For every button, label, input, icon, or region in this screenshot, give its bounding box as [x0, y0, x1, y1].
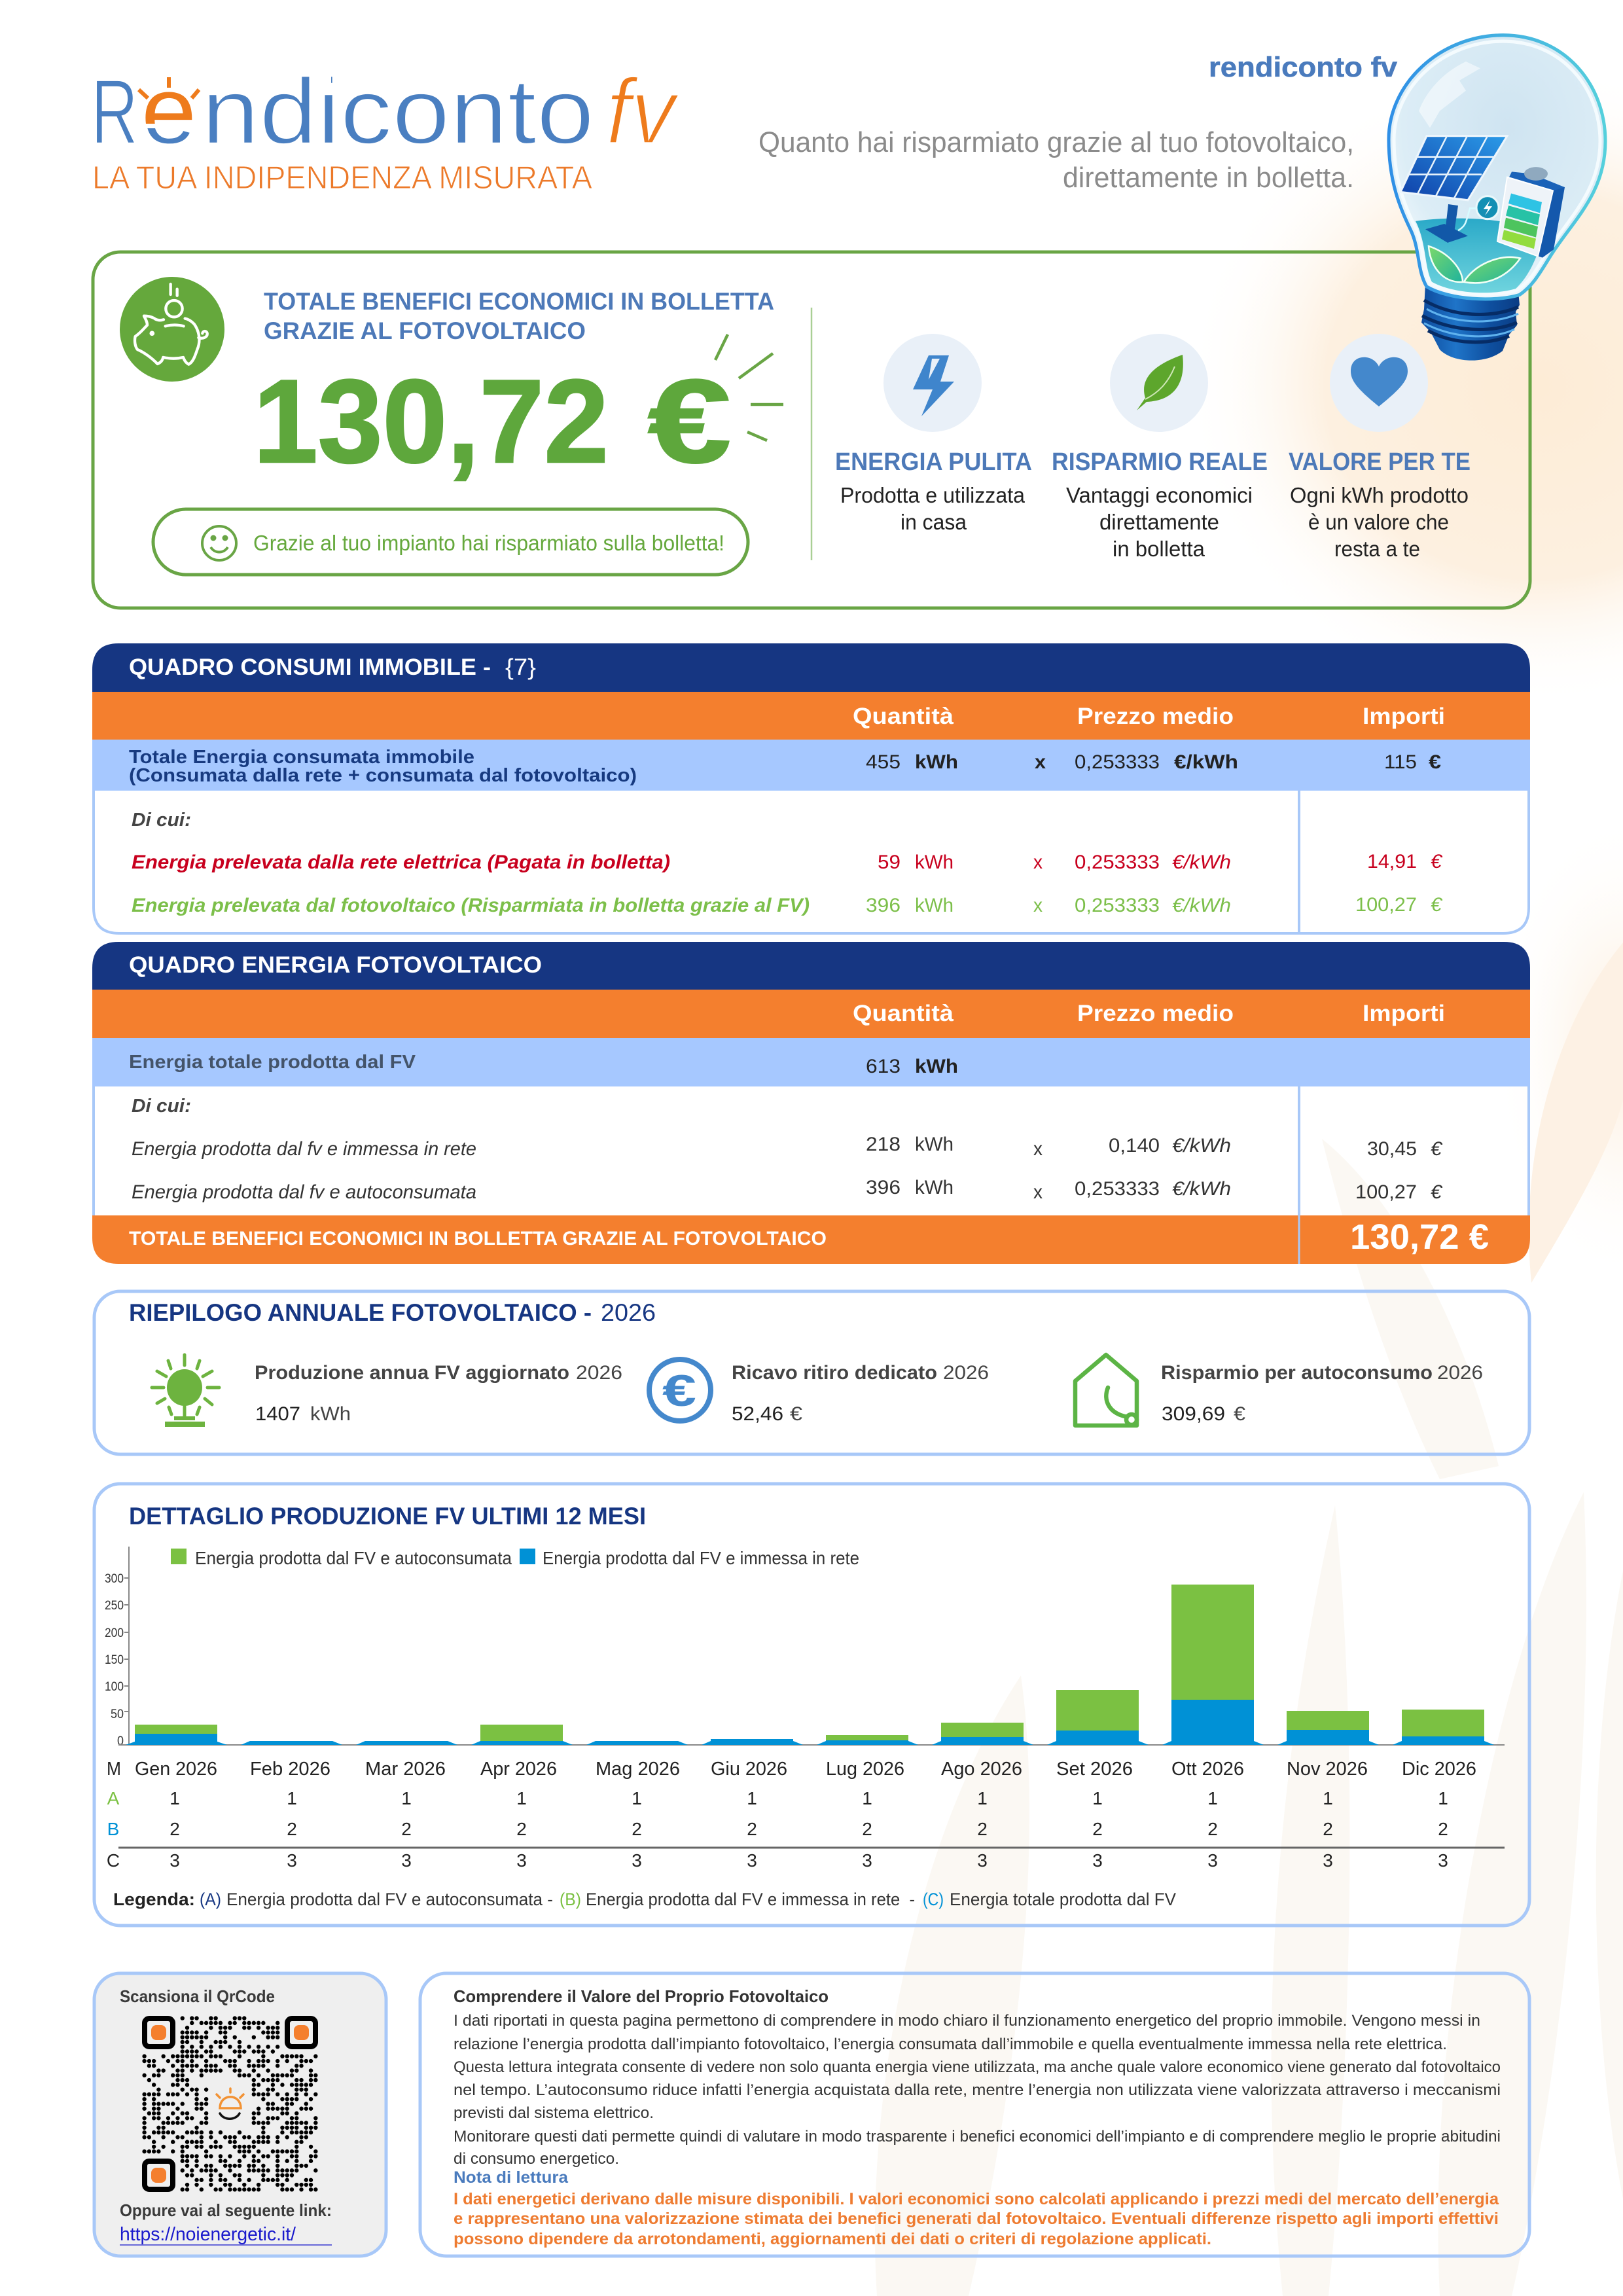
- table title bar: {7}: [505, 655, 536, 680]
- benefit: risparmio reale: direttamente: [1099, 510, 1219, 534]
- bar chart: 0: [117, 1734, 124, 1748]
- row: autoconsumata: €: [1431, 1181, 1442, 1203]
- row: totale energia consumata: (Consumata dalla rete + consumata dal fotovoltaico): [129, 765, 637, 786]
- logo letter e lower half: e: [141, 57, 196, 164]
- row B: 2: [862, 1819, 872, 1839]
- stat: ricavo ritiro dedicato: [732, 1362, 989, 1425]
- row: totale energia consumata: 455: [866, 751, 901, 773]
- explanation text: I dati riportati in questa pagina permettono di comprendere in modo chiaro il funzionamento energetico del proprio immobile. Vengono messi in: [454, 2012, 1480, 2030]
- row: totale energia consumata: Totale Energia consumata immobile: [129, 747, 474, 768]
- bar chart: 200: [105, 1626, 124, 1640]
- row C: 3: [287, 1850, 297, 1871]
- explanation text: [454, 2012, 1501, 2168]
- di cui label: Di cui:: [132, 1096, 191, 1117]
- stat: risparmio autoconsumo: 309,69: [1162, 1403, 1225, 1425]
- row A: 1: [401, 1788, 412, 1808]
- chart legend: Energia prodotta dal FV e immessa in rete: [543, 1548, 859, 1568]
- explanation heading: Comprendere il Valore del Proprio Fotovoltaico: [454, 1986, 829, 2006]
- qr heading: Scansiona il QrCode: [120, 1986, 275, 2006]
- row A: 1: [1323, 1788, 1333, 1808]
- chart key: (A): [200, 1890, 221, 1909]
- row A: 1: [632, 1788, 642, 1808]
- panel: quadro consumi immobile: [92, 643, 1530, 933]
- row B: 2: [1092, 1819, 1103, 1839]
- stat: produzione annua: kWh: [310, 1403, 351, 1425]
- row: immessa in rete: €/kWh: [1172, 1135, 1231, 1157]
- big total amount: 130,72: [253, 355, 609, 488]
- explanation text: Monitorare questi dati permette quindi di valutare in modo trasparente i benefici economici dell’impianto e di comprendere meglio le proprie abitudini: [454, 2128, 1501, 2145]
- chart key: (C): [923, 1890, 944, 1909]
- header subtitle: Quanto hai risparmiato grazie al tuo fotovoltaico,: [758, 126, 1354, 158]
- column headers: Quantità: [853, 704, 954, 729]
- logo letter R: R: [91, 60, 138, 163]
- benefit: risparmio reale: [1052, 448, 1268, 561]
- bar chart: 150: [105, 1653, 124, 1667]
- row B: B: [107, 1819, 119, 1839]
- explanation text: di consumo energetico.: [454, 2150, 619, 2168]
- row: totale energia consumata: kWh: [915, 751, 958, 773]
- row: immessa in rete: kWh: [915, 1134, 954, 1155]
- row C: C: [107, 1850, 120, 1871]
- reading note text: possono dipendere da arrotondamenti, aggiornamenti dei dati o criteri di regolazione applicati.: [454, 2230, 1211, 2248]
- row B: 2: [747, 1819, 757, 1839]
- month row: Set 2026: [1056, 1759, 1133, 1780]
- row: energia dal fotovoltaico: [132, 894, 1442, 916]
- stat: produzione annua: 1407: [255, 1403, 300, 1425]
- row: immessa in rete: €: [1431, 1138, 1442, 1160]
- chart legend: Energia prodotta dal FV e autoconsumata: [195, 1548, 512, 1568]
- benefit: valore per te: Ogni kWh prodotto: [1290, 483, 1469, 507]
- row: autoconsumata: Energia prodotta dal fv e autoconsumata: [132, 1181, 476, 1203]
- stat: risparmio autoconsumo: 2026: [1437, 1362, 1483, 1384]
- explanation text: Questa lettura integrata consente di vedere non solo quanta energia viene utilizzata, ma anche quale valore economico viene generato dal fotovoltaico: [454, 2058, 1501, 2076]
- column headers: Prezzo medio: [1077, 704, 1234, 729]
- stat: produzione annua: Produzione annua FV aggiornato: [255, 1362, 569, 1384]
- chart key: Energia prodotta dal FV e autoconsumata -: [226, 1890, 553, 1909]
- chart key: Legenda:: [113, 1890, 195, 1909]
- logo sun rays: [139, 77, 199, 98]
- benefit: risparmio reale: RISPARMIO REALE: [1052, 448, 1268, 476]
- row C: 3: [1323, 1850, 1333, 1871]
- reading note text: I dati energetici derivano dalle misure disponibili. I valori economici sono calcolati applicando i prezzi medi del mercato dell’energia: [454, 2190, 1499, 2208]
- row: energia dal fotovoltaico: 0,253333: [1075, 895, 1160, 916]
- table title bar: QUADRO ENERGIA FOTOVOLTAICO: [129, 952, 542, 978]
- row: energia dalla rete: 59: [878, 852, 901, 873]
- row: energia dal fotovoltaico: 100,27: [1355, 894, 1417, 916]
- bar chart: 300: [105, 1572, 124, 1586]
- month row: Mar 2026: [365, 1759, 446, 1780]
- row A: 1: [1438, 1788, 1448, 1808]
- row: immessa in rete: 0,140: [1109, 1135, 1160, 1157]
- row C: 3: [169, 1850, 180, 1871]
- logo fv: fv: [606, 60, 680, 164]
- benefit: valore per te: [1289, 448, 1471, 561]
- qr code: [145, 2018, 315, 2189]
- month row: Ago 2026: [941, 1759, 1022, 1780]
- big total amount: €: [648, 355, 731, 488]
- row: energia dal fotovoltaico: €/kWh: [1172, 895, 1231, 916]
- row: energia dal fotovoltaico: kWh: [915, 895, 954, 916]
- row: energia dalla rete: €: [1431, 851, 1442, 872]
- row: energia dal fotovoltaico: €: [1431, 894, 1442, 916]
- table title bar: [92, 643, 1530, 692]
- row: energia dalla rete: [132, 851, 1442, 873]
- row: energia totale prodotta: Energia totale prodotta dal FV: [129, 1052, 416, 1073]
- row: energia totale prodotta: 613: [866, 1056, 901, 1077]
- row: totale energia consumata: €/kWh: [1174, 751, 1238, 773]
- panel: total benefits: [93, 252, 1530, 608]
- icon: smile: [202, 526, 236, 560]
- row A: 1: [516, 1788, 527, 1808]
- explanation text: relazione l’energia prodotta dall’impianto fotovoltaico, l’energia consumata dall’immobile e quella eventualmente immessa nella rete elettrica.: [454, 2036, 1447, 2053]
- icon: sun lamp: [152, 1355, 219, 1427]
- table title bar: [92, 942, 1530, 990]
- row: autoconsumata: 100,27: [1355, 1181, 1417, 1203]
- row B: 2: [516, 1819, 527, 1839]
- month row: Ott 2026: [1171, 1759, 1244, 1780]
- row A: 1: [977, 1788, 988, 1808]
- logo: [95, 77, 678, 188]
- total row: 130,72 €: [1350, 1217, 1489, 1257]
- panel heading: GRAZIE AL FOTOVOLTAICO: [264, 317, 586, 344]
- link label: Oppure vai al seguente link:: [120, 2200, 332, 2220]
- row A: 1: [1092, 1788, 1103, 1808]
- icon: amount sparkle rays: [715, 334, 783, 440]
- header brand name: rendiconto fv: [1209, 52, 1397, 83]
- row: autoconsumata: €/kWh: [1172, 1178, 1231, 1200]
- row B: 2: [1323, 1819, 1333, 1839]
- row B: [107, 1819, 1448, 1839]
- bar chart: 100: [105, 1680, 124, 1694]
- benefit: energia pulita: Prodotta e utilizzata: [840, 483, 1026, 507]
- row A: [107, 1788, 1448, 1808]
- table title bar: QUADRO CONSUMI IMMOBILE -: [129, 655, 491, 680]
- row: autoconsumata: 396: [866, 1177, 901, 1198]
- row C: 3: [401, 1850, 412, 1871]
- row: energia dalla rete: x: [1033, 852, 1043, 873]
- bar chart: 250: [105, 1599, 124, 1613]
- chart key: [113, 1890, 1176, 1909]
- row: autoconsumata: kWh: [915, 1177, 954, 1198]
- icon: light bulb with solar panel and battery: [1389, 35, 1605, 361]
- month row: Lug 2026: [826, 1759, 904, 1780]
- row B: 2: [401, 1819, 412, 1839]
- stat: risparmio autoconsumo: €: [1234, 1403, 1245, 1425]
- row: totale energia consumata: 0,253333: [1075, 751, 1160, 773]
- month row: Feb 2026: [250, 1759, 330, 1780]
- reading note text: e rappresentano una valorizzazione stimata dei benefici generati dal fotovoltaico. Eventuali differenze rispetto agli importi effettivi: [454, 2210, 1499, 2228]
- month row: Mag 2026: [596, 1759, 680, 1780]
- row: autoconsumata: [132, 1177, 1442, 1203]
- benefit: valore per te: è un valore che: [1308, 510, 1449, 534]
- row A: 1: [287, 1788, 297, 1808]
- icon: leaf: [1110, 334, 1208, 432]
- month row: Giu 2026: [711, 1759, 787, 1780]
- row B: 2: [287, 1819, 297, 1839]
- callout pill: [153, 509, 748, 575]
- explanation text: nel tempo. L’autoconsumo riduce infatti l’energia acquistata dalla rete, mentre l’energia non utilizzata viene valorizzata attraverso i meccanismi: [454, 2081, 1501, 2099]
- chart key: Energia totale prodotta dal FV: [950, 1890, 1176, 1909]
- callout text: Grazie al tuo impianto hai risparmiato sulla bolletta!: [253, 531, 724, 555]
- bar chart: [105, 1547, 1505, 1748]
- logo word remainder: ndiconto: [202, 60, 594, 164]
- stat: ricavo ritiro dedicato: €: [790, 1403, 802, 1425]
- panel: quadro energia fotovoltaico: [92, 942, 1530, 1264]
- panel: spiegazione: [420, 1973, 1529, 2256]
- benefit: energia pulita: in casa: [901, 510, 967, 534]
- panel heading: RIEPILOGO ANNUALE FOTOVOLTAICO -: [129, 1299, 592, 1326]
- row: totale energia consumata: [92, 740, 1530, 791]
- column headers: Prezzo medio: [1077, 1001, 1234, 1026]
- icon: euro coin: [649, 1359, 711, 1421]
- icon: heart: [1330, 334, 1428, 432]
- stat: ricavo ritiro dedicato: 52,46: [732, 1403, 783, 1425]
- month row: Nov 2026: [1287, 1759, 1368, 1780]
- row: totale energia consumata: €: [1429, 751, 1441, 773]
- stat: produzione annua: 2026: [576, 1362, 622, 1384]
- icon: house: [1075, 1355, 1137, 1426]
- row A: 1: [862, 1788, 872, 1808]
- benefit: risparmio reale: Vantaggi economici: [1066, 483, 1253, 507]
- stat: produzione annua: [255, 1362, 622, 1425]
- row: immessa in rete: x: [1033, 1138, 1043, 1160]
- benefit: energia pulita: [835, 448, 1032, 534]
- row B: 2: [1438, 1819, 1448, 1839]
- icon: piggy bank: [120, 277, 224, 382]
- logo tagline: LA TUA INDIPENDENZA MISURATA: [92, 160, 592, 196]
- row: energia totale prodotta: kWh: [915, 1056, 958, 1077]
- total row: TOTALE BENEFICI ECONOMICI IN BOLLETTA GRAZIE AL FOTOVOLTAICO: [129, 1228, 827, 1249]
- column headers: Quantità: [853, 1001, 954, 1026]
- reading note text: [454, 2190, 1499, 2248]
- row A: 1: [747, 1788, 757, 1808]
- row: energia dalla rete: 0,253333: [1075, 852, 1160, 873]
- panel: dettaglio produzione: [94, 1484, 1529, 1926]
- icon: euro coin: €: [662, 1366, 696, 1416]
- stat: ricavo ritiro dedicato: 2026: [943, 1362, 989, 1384]
- row: energia dalla rete: Energia prelevata dalla rete elettrica (Pagata in bolletta): [132, 852, 670, 873]
- row C: 3: [1207, 1850, 1218, 1871]
- panel heading: DETTAGLIO PRODUZIONE FV ULTIMI 12 MESI: [129, 1503, 646, 1530]
- row A: 1: [1207, 1788, 1218, 1808]
- row: immessa in rete: Energia prodotta dal fv e immessa in rete: [132, 1138, 476, 1160]
- row: energia dal fotovoltaico: x: [1033, 895, 1043, 916]
- icon: lightning: [883, 334, 982, 432]
- month row: [107, 1759, 1476, 1780]
- row B: 2: [977, 1819, 988, 1839]
- benefit: energia pulita: ENERGIA PULITA: [835, 448, 1032, 476]
- column headers: [92, 990, 1530, 1038]
- row B: 2: [169, 1819, 180, 1839]
- chart key: (B): [560, 1890, 581, 1909]
- chart legend: [171, 1548, 859, 1568]
- row: autoconsumata: x: [1033, 1181, 1043, 1203]
- row B: 2: [632, 1819, 642, 1839]
- panel heading: [264, 288, 774, 344]
- row C: 3: [516, 1850, 527, 1871]
- benefit: valore per te: resta a te: [1334, 537, 1420, 561]
- column headers: Importi: [1363, 704, 1445, 729]
- row C: 3: [632, 1850, 642, 1871]
- row: energia dalla rete: 14,91: [1367, 851, 1417, 872]
- row C: 3: [977, 1850, 988, 1871]
- benefit: risparmio reale: in bolletta: [1113, 537, 1205, 561]
- month row: Gen 2026: [135, 1759, 217, 1780]
- row C: [107, 1850, 1448, 1871]
- row C: 3: [1092, 1850, 1103, 1871]
- row: immessa in rete: 30,45: [1367, 1138, 1417, 1160]
- panel heading: TOTALE BENEFICI ECONOMICI IN BOLLETTA: [264, 288, 774, 315]
- chart data table: [107, 1759, 1505, 1871]
- benefit: valore per te: VALORE PER TE: [1289, 448, 1471, 476]
- explanation text: previsti dal sistema elettrico.: [454, 2104, 654, 2122]
- month row: Apr 2026: [480, 1759, 557, 1780]
- row A: 1: [169, 1788, 180, 1808]
- bar chart: 50: [111, 1708, 124, 1721]
- row C: 3: [1438, 1850, 1448, 1871]
- di cui label: Di cui:: [132, 810, 191, 831]
- row C: 3: [747, 1850, 757, 1871]
- panel: riepilogo annuale: [94, 1291, 1529, 1454]
- column headers: [92, 692, 1530, 740]
- logo letter e upper sun half: e: [141, 57, 196, 164]
- column headers: Importi: [1363, 1001, 1445, 1026]
- month row: M: [107, 1759, 121, 1780]
- panel heading: 2026: [601, 1299, 656, 1326]
- reading note heading: Nota di lettura: [454, 2168, 569, 2187]
- row: energia dalla rete: €/kWh: [1172, 852, 1231, 873]
- row: immessa in rete: 218: [866, 1134, 901, 1155]
- row A: A: [107, 1788, 120, 1808]
- header subtitle: [758, 126, 1354, 194]
- row B: 2: [1207, 1819, 1218, 1839]
- row: totale energia consumata: x: [1035, 751, 1046, 773]
- link: https://noienergetic.it/: [120, 2224, 296, 2245]
- row: immessa in rete: [132, 1134, 1442, 1160]
- row: energia totale prodotta: [92, 1038, 1530, 1086]
- chart key: Energia prodotta dal FV e immessa in rete -: [586, 1890, 915, 1909]
- stat: ricavo ritiro dedicato: Ricavo ritiro dedicato: [732, 1362, 937, 1384]
- total row: [92, 1215, 1530, 1264]
- month row: Dic 2026: [1402, 1759, 1476, 1780]
- row C: 3: [862, 1850, 872, 1871]
- row: energia dalla rete: kWh: [915, 852, 954, 873]
- stat: risparmio autoconsumo: [1161, 1362, 1483, 1425]
- stat: risparmio autoconsumo: Risparmio per autoconsumo: [1161, 1362, 1433, 1384]
- row: energia dal fotovoltaico: Energia prelevata dal fotovoltaico (Risparmiata in bolletta grazie al FV): [132, 895, 810, 916]
- row: totale energia consumata: 115: [1384, 751, 1417, 773]
- panel: qr code: [94, 1973, 386, 2256]
- row: autoconsumata: 0,253333: [1075, 1178, 1160, 1200]
- header subtitle: direttamente in bolletta.: [1063, 162, 1354, 194]
- row: energia dal fotovoltaico: 396: [866, 895, 901, 916]
